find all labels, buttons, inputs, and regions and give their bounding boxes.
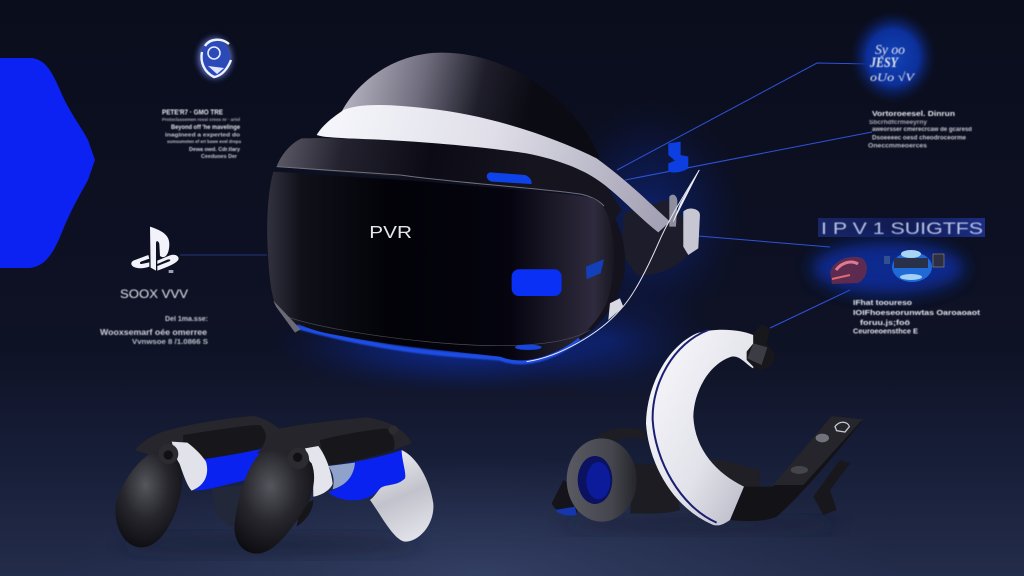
- blue light bottom: [515, 345, 542, 350]
- text block: top left: Protoclassemen rossi cross nr · ariol: [162, 117, 240, 123]
- headset: [267, 53, 699, 362]
- text block: lower right: Ceuroeoensthce E: [853, 328, 918, 336]
- visor: [267, 172, 614, 360]
- text block: lower right: foruu.js;foö: [860, 320, 910, 327]
- brand text: SOOX VVV: SOOX VVV: [120, 289, 188, 301]
- text block: top left: inagineed a experted do: [165, 132, 241, 138]
- text block: top left: sumsumoten ef ert bawe evel dropa: [167, 139, 241, 145]
- text block: top left: Dewa owd. Cdr.tlary: [189, 147, 241, 153]
- text block: lower right: IOIFhoeseorunwtas Oaroaoaot: [853, 310, 981, 317]
- top-right glowing script badge: JESY: [869, 55, 899, 71]
- text block: lower left: Wooxsemarf oée omerree: [100, 328, 208, 337]
- accessory: headset strap and C-shaped band: [552, 324, 863, 525]
- top-right glowing script badge: oUo √V: [870, 70, 916, 84]
- white C band: [646, 330, 753, 525]
- band tip: [747, 324, 775, 370]
- blue side badge: [586, 259, 604, 279]
- ear cup: [567, 438, 637, 522]
- text block: lower right: [853, 300, 981, 336]
- left controller: [115, 416, 287, 547]
- top-left emblem: [194, 33, 236, 83]
- text block: lower right: IFhat tooureso: [853, 300, 912, 307]
- text block: lower left: Del 1ma.sse:: [165, 316, 208, 323]
- blue light top: [487, 172, 532, 184]
- controllers shadow: [120, 537, 420, 553]
- text block: top left: PETE'R7 · GMO TRE: [162, 108, 223, 116]
- headband strap: [317, 105, 670, 232]
- text block: top right: [868, 111, 972, 150]
- headset label PVR: PVR: [369, 222, 412, 242]
- thumbnail: blue device: [892, 252, 932, 282]
- white thin side rim: [527, 170, 699, 362]
- text block: top left: Ceeduoes Der: [201, 154, 238, 160]
- glow rim under headset: [297, 300, 613, 362]
- lower black strap and paddle: [552, 416, 863, 521]
- text block: top right: Oneccmmeoerces: [868, 144, 928, 150]
- text block: lower left: Vvnwsoe 8 /1.0866 S: [132, 337, 208, 346]
- panel: right banner heading: I P V 1 SUIGTFS: [821, 219, 983, 238]
- headset dome: [340, 53, 600, 158]
- text block: top right: Sbcrhdfcrmeeyrny: [869, 120, 928, 126]
- blue light side: [512, 269, 562, 296]
- thumbnail: red headset: [830, 257, 867, 284]
- blue blob at left edge: [0, 58, 95, 268]
- text block: top right: aweorsser cmerecrcaw de gcaresd: [872, 127, 972, 133]
- top-right glowing script badge: [850, 11, 936, 103]
- text block: lower left: [100, 316, 208, 346]
- PlayStation style logo: [131, 227, 179, 273]
- text block: top left: [162, 108, 241, 160]
- right controller: [234, 417, 433, 554]
- upper shell: [277, 138, 622, 227]
- text block: top right: Dsoeeeec oesd cheodroceorme: [872, 136, 967, 142]
- top-right glowing script badge: Sy oo: [875, 43, 905, 58]
- front clip: [273, 301, 301, 333]
- headset back bracket and blue small icon: [622, 142, 700, 275]
- text block: top left: Beyond off 'he mavelinge: [171, 124, 240, 131]
- connector lines: [180, 63, 872, 328]
- accessory shadow: [560, 519, 840, 531]
- panel: right product thumbnails: [812, 242, 964, 294]
- controllers: [115, 416, 433, 554]
- right side shell: [560, 197, 625, 340]
- text block: top right: Vortoroeesel. Dinrun: [872, 111, 955, 118]
